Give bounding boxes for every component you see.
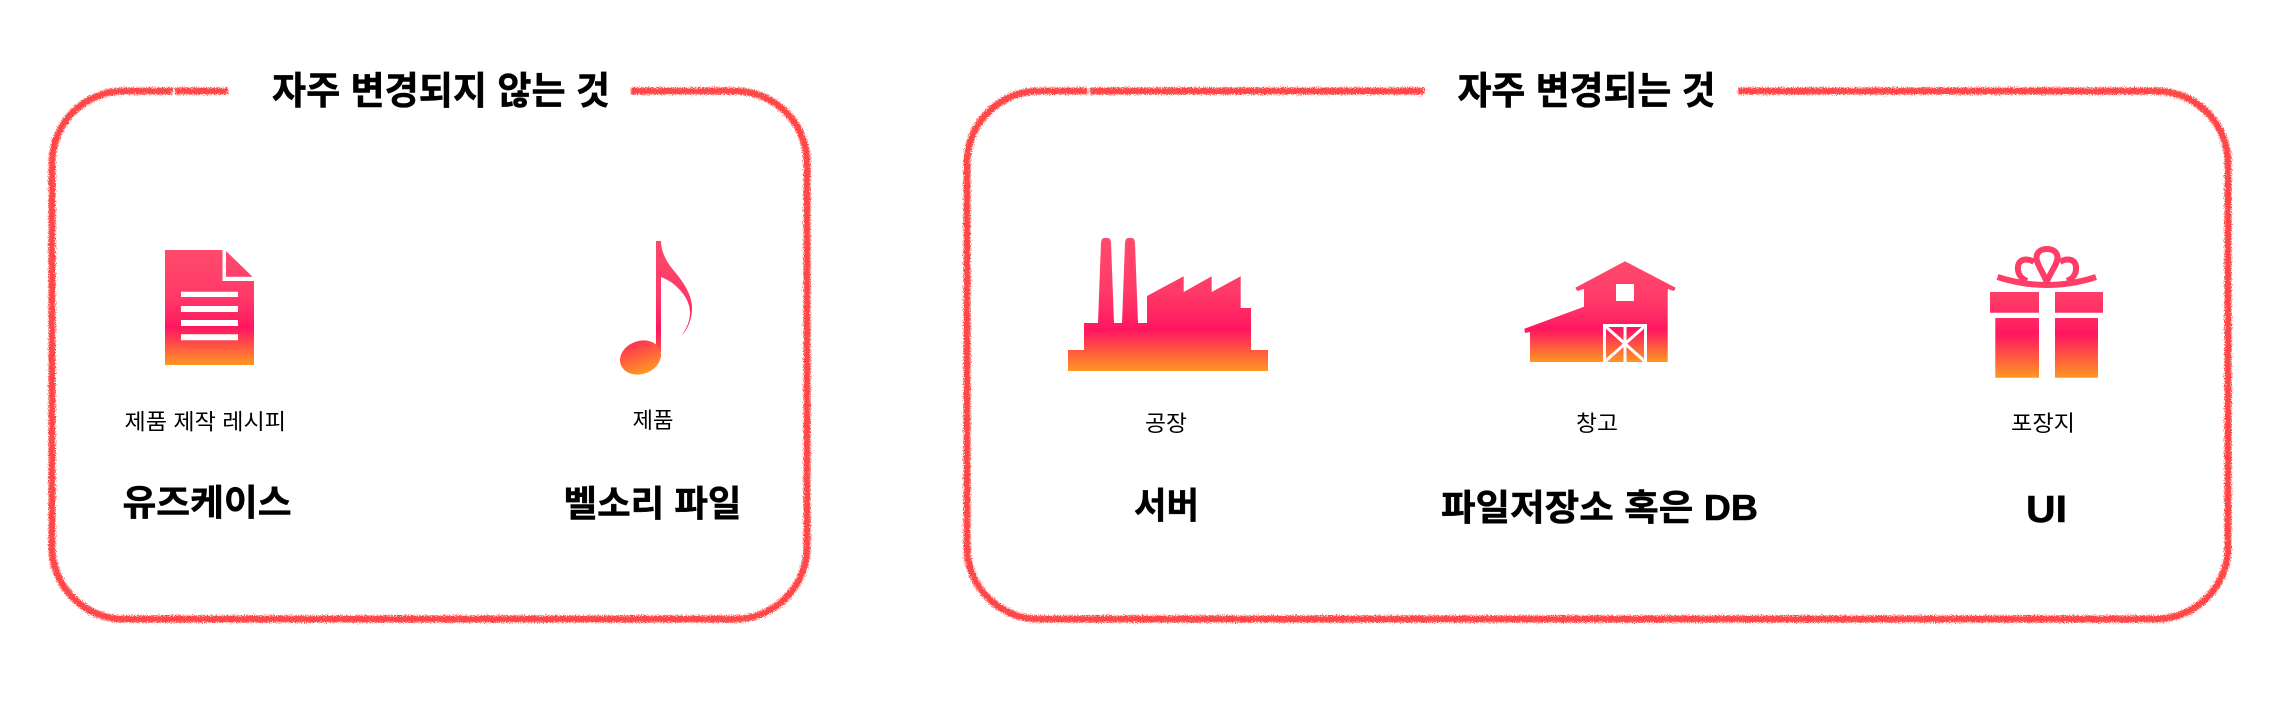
crayon border: right panel xyxy=(967,91,2228,619)
label: warehouse: 창고 xyxy=(1576,411,1618,436)
label: file storage or DB: 파일저장소 혹은 DB xyxy=(1441,487,1758,528)
label: wrapping paper: 포장지 xyxy=(2011,411,2075,436)
label: use case: 유즈케이스 xyxy=(122,482,292,523)
panel: frequently changing things xyxy=(967,71,2228,619)
icon: music note xyxy=(615,241,692,380)
crayon border: left panel xyxy=(52,91,807,619)
icon: gift box xyxy=(1990,249,2103,378)
icon: factory xyxy=(1068,238,1268,371)
label: ringtone file: 벨소리 파일 xyxy=(564,483,742,524)
label: product recipe: 제품 제작 레시피 xyxy=(124,410,286,434)
label: product: 제품 xyxy=(632,408,674,433)
label: server: 서버 xyxy=(1134,485,1199,526)
icon: barn warehouse xyxy=(1524,261,1676,362)
icon: document xyxy=(165,250,254,365)
heading: frequently changing: 자주 변경되는 것 xyxy=(1458,71,1716,113)
label: UI: UI xyxy=(2026,489,2067,531)
label: factory: 공장 xyxy=(1145,411,1187,436)
heading: rarely changing: 자주 변경되지 않는 것 xyxy=(272,71,610,113)
panel: rarely changing things xyxy=(52,71,807,619)
